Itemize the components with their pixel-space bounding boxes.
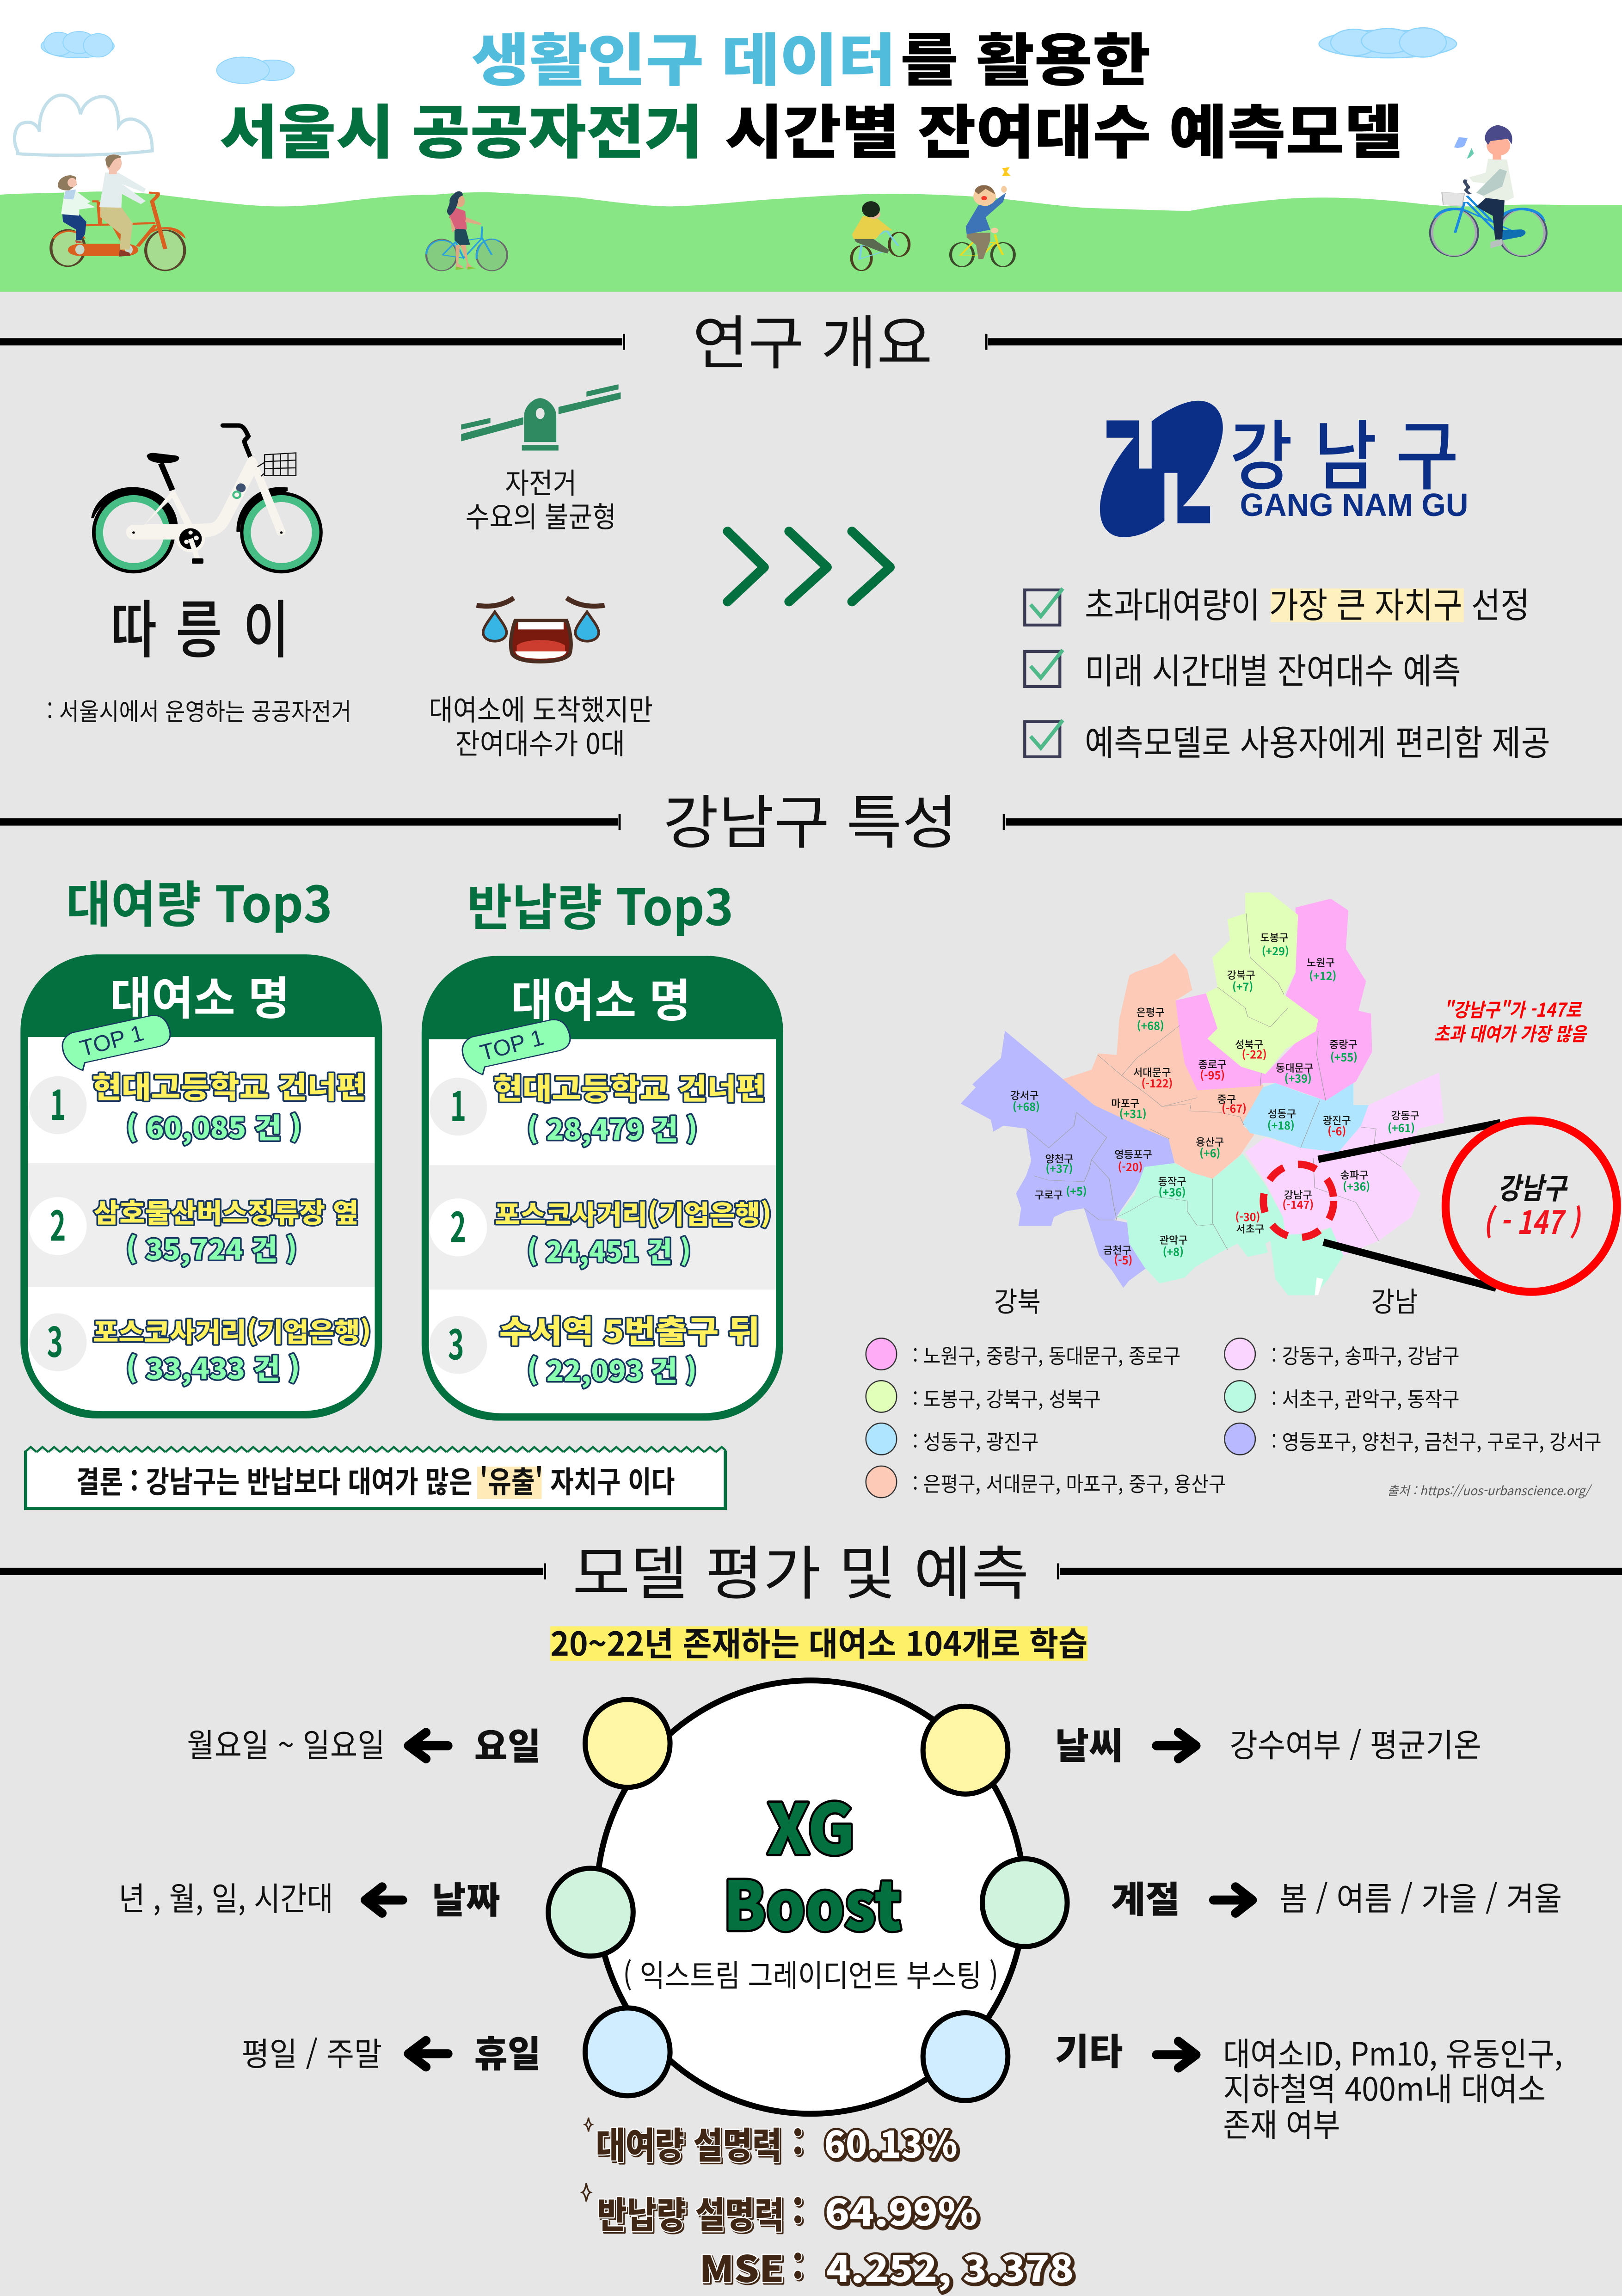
illustration: man with blue bicycle and music notes	[1430, 125, 1547, 257]
panel: header banner	[0, 0, 1622, 292]
map labels: 강북 districts: 양천구	[1045, 1151, 1074, 1166]
text: source: 출처 : https://uos-urbanscience.org/	[1387, 1481, 1592, 1499]
section heading: 모델 평가 및 예측	[0, 1527, 1622, 1611]
feature: 요일: 요일	[474, 1717, 541, 1770]
legend item 3	[866, 1423, 1038, 1455]
map labels: 강북 districts: (-5)	[1114, 1252, 1132, 1268]
arrows: triple chevron	[728, 531, 890, 602]
row 3: 포스코사거리(기업은행)	[93, 1312, 371, 1350]
metric: 대여량 설명력	[585, 2114, 958, 2169]
callout: 강남구 (-147) circle	[1445, 1121, 1617, 1292]
feature: 기타: 지하철역 400m내 대여소	[1223, 2063, 1546, 2110]
map labels: 강북 districts: (-6)	[1327, 1123, 1346, 1139]
feature: 계절	[1111, 1870, 1562, 1923]
row 3: 3	[47, 1309, 63, 1369]
badge: TOP 1	[62, 1015, 170, 1070]
icon: ttareungi bicycle	[91, 425, 323, 573]
icon: crying face	[477, 598, 605, 662]
map: 서울시 자치구 초과 대여량	[961, 892, 1617, 1320]
feature: 요일	[187, 1717, 541, 1770]
legend item 4: : 은평구, 서대문구, 마포구, 중구, 용산구	[913, 1467, 1226, 1497]
row 2: ( 35,724 건 )	[126, 1228, 297, 1268]
row 1: 1	[450, 1074, 466, 1133]
section heading: 강남구 특성	[0, 776, 1622, 860]
metric: 대여량 설명력: 60.13%	[824, 2115, 958, 2168]
metric: MSE: MSE	[699, 2240, 784, 2293]
text: 자전거 수요의 불균형	[466, 460, 616, 535]
map labels: 강남 districts: 강남구	[1284, 1187, 1312, 1202]
feature: 요일: 월요일 ~ 일요일	[187, 1719, 385, 1766]
text: 대여소 도착 잔여대수 0대: 대여소에 도착했지만	[429, 687, 653, 729]
row 1: ( 60,085 건 )	[126, 1106, 301, 1147]
section heading: 연구 개요: 연구 개요	[693, 296, 933, 381]
map labels: 강북 districts: 노원구	[1307, 955, 1335, 970]
annotation: 강남구 초과 대여: "강남구"가 -147로	[1444, 995, 1582, 1022]
map labels: 강북 districts: 성동구	[1268, 1106, 1296, 1121]
check item 3: 예측모델로 사용자에게 편리함 제공	[1085, 715, 1550, 766]
node: 날짜	[548, 1868, 633, 1956]
line: callout bottom	[1323, 1242, 1496, 1288]
node: 휴일	[585, 2008, 670, 2096]
feature: 날짜	[118, 1871, 500, 1924]
badge: TOP 1: TOP 1	[478, 1025, 547, 1066]
map labels: 강북 districts: 은평구	[1137, 1005, 1165, 1019]
map labels: 강북 districts: (+18)	[1267, 1117, 1295, 1133]
map labels: 강북 districts: (+6)	[1199, 1145, 1220, 1160]
map labels: 강북 districts: (-122)	[1142, 1075, 1173, 1091]
map labels: 강북 districts: 성북구	[1235, 1037, 1263, 1051]
map labels: 강북 districts: 서대문구	[1133, 1065, 1171, 1080]
row 1	[29, 1065, 366, 1147]
node: 날씨	[923, 1706, 1008, 1794]
map labels: 강남 districts: 강동구	[1391, 1108, 1419, 1123]
row 1	[430, 1066, 766, 1148]
map labels: 강북 districts: 금천구	[1103, 1242, 1131, 1257]
cloud: small left	[41, 31, 114, 58]
map labels: 강북 districts: (+55)	[1330, 1049, 1358, 1065]
feature: 휴일: 휴일	[474, 2025, 541, 2078]
title: 서울시 공공자전거	[220, 86, 703, 170]
feature: 기타: 대여소ID, Pm10, 유동인구,	[1223, 2028, 1563, 2075]
map labels: 강북 districts: (+68)	[1013, 1099, 1040, 1114]
cloud: right	[1319, 28, 1456, 58]
row 3: 3	[448, 1312, 464, 1372]
map labels: 강북 districts: 영등포구	[1114, 1147, 1152, 1161]
metric: 반납량 설명력: :	[792, 2182, 804, 2235]
legend item 7: : 영등포구, 양천구, 금천구, 구로구, 강서구	[1272, 1425, 1602, 1455]
text: 자전거 수요의 불균형: 자전거	[505, 460, 577, 502]
cloud: outlined white	[14, 95, 152, 155]
row 2: 삼호물산버스정류장 옆	[94, 1192, 359, 1230]
panel: 대여량 top3 card	[20, 954, 382, 1418]
label: 따릉이: 따릉이	[111, 579, 289, 670]
line: callout top	[1318, 1123, 1500, 1160]
title: 를 활용한	[900, 14, 1151, 97]
callout: 결론	[25, 1445, 726, 1509]
text: XG: XG	[767, 1774, 855, 1874]
map labels: 강남 districts: (+61)	[1388, 1120, 1415, 1136]
map labels: 강남 districts: 송파구	[1340, 1167, 1369, 1182]
node: 요일	[585, 1700, 670, 1787]
metric: 반납량 설명력: 64.99%	[825, 2183, 978, 2236]
map labels: 강남 districts: (-147)	[1282, 1197, 1314, 1212]
row 1: 현대고등학교 건너편	[493, 1066, 766, 1108]
map labels: 강북 districts: 광진구	[1323, 1113, 1351, 1128]
map labels: 강북 districts: 용산구	[1196, 1134, 1224, 1149]
row 3: ( 22,093 건 )	[527, 1349, 697, 1389]
map labels: 강북 districts: 중구	[1217, 1092, 1236, 1106]
feature: 날씨	[1055, 1716, 1481, 1769]
legend item 2: : 도봉구, 강북구, 성북구	[913, 1383, 1101, 1412]
map labels: 강남 districts: 관악구	[1160, 1232, 1188, 1247]
title: 생활인구 데이터	[471, 14, 896, 97]
text: 자전거 수요의 불균형: 수요의 불균형	[466, 494, 616, 535]
annotation: 강남구 초과 대여	[1434, 995, 1587, 1046]
metric: MSE: :	[792, 2238, 804, 2291]
map labels: 강북 districts: (+68)	[1137, 1017, 1164, 1033]
callout: 강남구 (-147) circle: 강남구	[1498, 1166, 1568, 1208]
legend item 1: : 노원구, 중랑구, 동대문구, 종로구	[913, 1340, 1180, 1369]
feature: 기타: 존재 여부	[1223, 2100, 1340, 2146]
feature: 계절: 봄 / 여름 / 가을 / 겨울	[1279, 1873, 1562, 1920]
green hills	[0, 191, 1622, 292]
map labels: 강북 districts: (+39)	[1284, 1070, 1312, 1086]
map labels: 강남 districts: (-30)	[1235, 1209, 1260, 1224]
map labels: 강북 districts: 강서구	[1010, 1087, 1039, 1102]
map labels: 강북 districts: (+37)	[1045, 1160, 1073, 1176]
text: 대여소 도착 잔여대수 0대	[429, 687, 653, 762]
text: 익스트림 그레이디언트 부스팅: ( 익스트림 그레이디언트 부스팅 )	[623, 1951, 998, 1995]
row 2	[430, 1194, 772, 1270]
logo: 강남구: GANG NAM GU	[1240, 487, 1468, 523]
callout: 결론: 결론 : 강남구는 반납보다 대여가 많은 '유출' 자치구 이다	[76, 1458, 675, 1501]
metric: 대여량 설명력: 대여량 설명력	[596, 2116, 782, 2169]
map labels: 강북 districts: (+5)	[1066, 1183, 1087, 1199]
logo: 강남구: 강남구	[1229, 395, 1459, 505]
row 2: ( 24,451 건 )	[527, 1230, 691, 1270]
map labels: 강남 districts: (+36)	[1343, 1178, 1370, 1194]
illustration: child in yellow	[852, 201, 909, 270]
panel: 반납량 top3 card: 대여소 명	[511, 964, 691, 1030]
map labels: 강북 districts: (-67)	[1222, 1100, 1247, 1116]
row 1: ( 28,479 건 )	[527, 1108, 698, 1148]
illustration: woman with bicycle	[426, 191, 507, 270]
metric: 반납량 설명력: 반납량 설명력	[597, 2185, 784, 2239]
row 3	[29, 1309, 371, 1387]
row 2: 포스코사거리(기업은행)	[495, 1194, 772, 1232]
map labels: 강북 districts: 구로구	[1035, 1187, 1063, 1202]
logo: 강남구	[1100, 395, 1468, 537]
feature: 기타	[1055, 2022, 1563, 2146]
check item 1: 초과대여량이 가장 큰 자치구 선정	[1085, 577, 1530, 628]
label: 강남: 강남	[1371, 1280, 1418, 1320]
map labels: 강북 districts	[1010, 930, 1358, 1268]
metric: MSE: 4.252, 3.378	[826, 2240, 1074, 2293]
feature: 휴일	[241, 2025, 541, 2078]
row 3: ( 33,433 건 )	[126, 1347, 300, 1387]
checklist	[1025, 577, 1550, 766]
row 2: 2	[450, 1194, 466, 1254]
node: 기타	[923, 2013, 1008, 2100]
map labels: 강남 districts: 서초구	[1236, 1221, 1264, 1236]
section heading: 모델 평가 및 예측: 모델 평가 및 예측	[572, 1527, 1029, 1611]
row 1: 현대고등학교 건너편	[92, 1065, 366, 1107]
illustration: tandem bicycle riders	[51, 154, 185, 270]
feature: 기타: 기타	[1055, 2022, 1123, 2075]
map labels: 강북 districts: (+31)	[1119, 1105, 1147, 1121]
map labels: 강북 districts: 강북구	[1227, 967, 1255, 982]
title: 시간별 잔여대수 예측모델	[725, 86, 1402, 170]
map labels: 강북 districts: 동대문구	[1276, 1060, 1314, 1075]
row 1: 1	[50, 1072, 66, 1132]
text: 대여소 도착 잔여대수 0대: 잔여대수가 0대	[455, 721, 625, 762]
metric: MSE	[699, 2238, 1074, 2293]
legend item 5: : 강동구, 송파구, 강남구	[1272, 1340, 1460, 1369]
row 2: 2	[50, 1193, 66, 1253]
map labels: 강북 districts: (-20)	[1118, 1159, 1143, 1174]
map labels: 강북 districts: 중랑구	[1329, 1037, 1358, 1051]
map labels: 강북 districts: (+7)	[1232, 978, 1253, 994]
map labels: 강북 districts: (+29)	[1262, 943, 1289, 958]
row 3	[430, 1307, 760, 1389]
metric: 대여량 설명력: :	[792, 2114, 804, 2167]
map labels: 강북 districts: (+12)	[1309, 968, 1336, 983]
callout: 강남구 (-147) circle: ( - 147 )	[1483, 1197, 1581, 1244]
illustration: boy waving	[951, 167, 1014, 267]
heading: 반납량 Top3: 반납량 Top3	[467, 868, 733, 940]
section heading: 연구 개요	[0, 296, 1622, 381]
text: training data banner: 20~22년 존재하는 대여소 104개로 학습	[550, 1617, 1087, 1665]
map labels: 강남 districts: (+36)	[1159, 1184, 1186, 1200]
legend item 6: : 서초구, 관악구, 동작구	[1272, 1383, 1460, 1412]
badge: TOP 1	[462, 1019, 570, 1074]
icon: seesaw	[461, 384, 621, 451]
section heading: 강남구 특성: 강남구 특성	[663, 776, 958, 860]
label: 강북: 강북	[994, 1280, 1041, 1320]
node: 계절	[982, 1859, 1067, 1946]
row 3: 수서역 5번출구 뒤	[499, 1307, 760, 1351]
feature: 날씨: 날씨	[1055, 1716, 1123, 1769]
annotation: 강남구 초과 대여: 초과 대여가 가장 많음	[1434, 1019, 1587, 1046]
check item 2: 미래 시간대별 잔여대수 예측	[1085, 643, 1461, 694]
map labels: 강남 districts	[1158, 1108, 1419, 1259]
map labels: 강북 districts: (-22)	[1242, 1046, 1267, 1062]
map labels: 강남 districts: 동작구	[1158, 1174, 1186, 1189]
legend item 3: : 성동구, 광진구	[913, 1425, 1038, 1455]
diagram: XGBoost feature circle	[548, 1681, 1067, 2114]
metric: 반납량 설명력	[582, 2182, 978, 2239]
text: 따릉이 설명: : 서울시에서 운영하는 공공자전거	[47, 693, 351, 728]
map labels: 강북 districts: 마포구	[1111, 1096, 1139, 1111]
title	[220, 14, 1402, 170]
feature: 계절: 계절	[1111, 1870, 1180, 1923]
panel: 대여량 top3 card: 대여소 명	[110, 962, 290, 1028]
heading: 대여량 Top3: 대여량 Top3	[66, 865, 332, 937]
text: Boost: Boost	[723, 1852, 902, 1949]
map labels: 강남 districts: (+8)	[1163, 1243, 1184, 1259]
highlight: dashed circle 강남구	[1263, 1164, 1333, 1238]
badge: TOP 1: TOP 1	[77, 1020, 146, 1062]
map labels: 강북 districts: 종로구	[1198, 1056, 1227, 1071]
feature: 날짜: 날짜	[432, 1871, 500, 1924]
panel: 반납량 top3 card	[422, 956, 783, 1421]
feature: 휴일: 평일 / 주말	[241, 2028, 382, 2075]
cloud: double	[217, 57, 294, 83]
map labels: 강북 districts: 도봉구	[1260, 930, 1289, 945]
feature: 날씨: 강수여부 / 평균기온	[1229, 1719, 1481, 1766]
feature: 날짜: 년 , 월, 일, 시간대	[118, 1873, 333, 1920]
row 2	[29, 1192, 359, 1268]
legend	[866, 1338, 1602, 1498]
map labels: 강북 districts: (-95)	[1200, 1067, 1225, 1083]
